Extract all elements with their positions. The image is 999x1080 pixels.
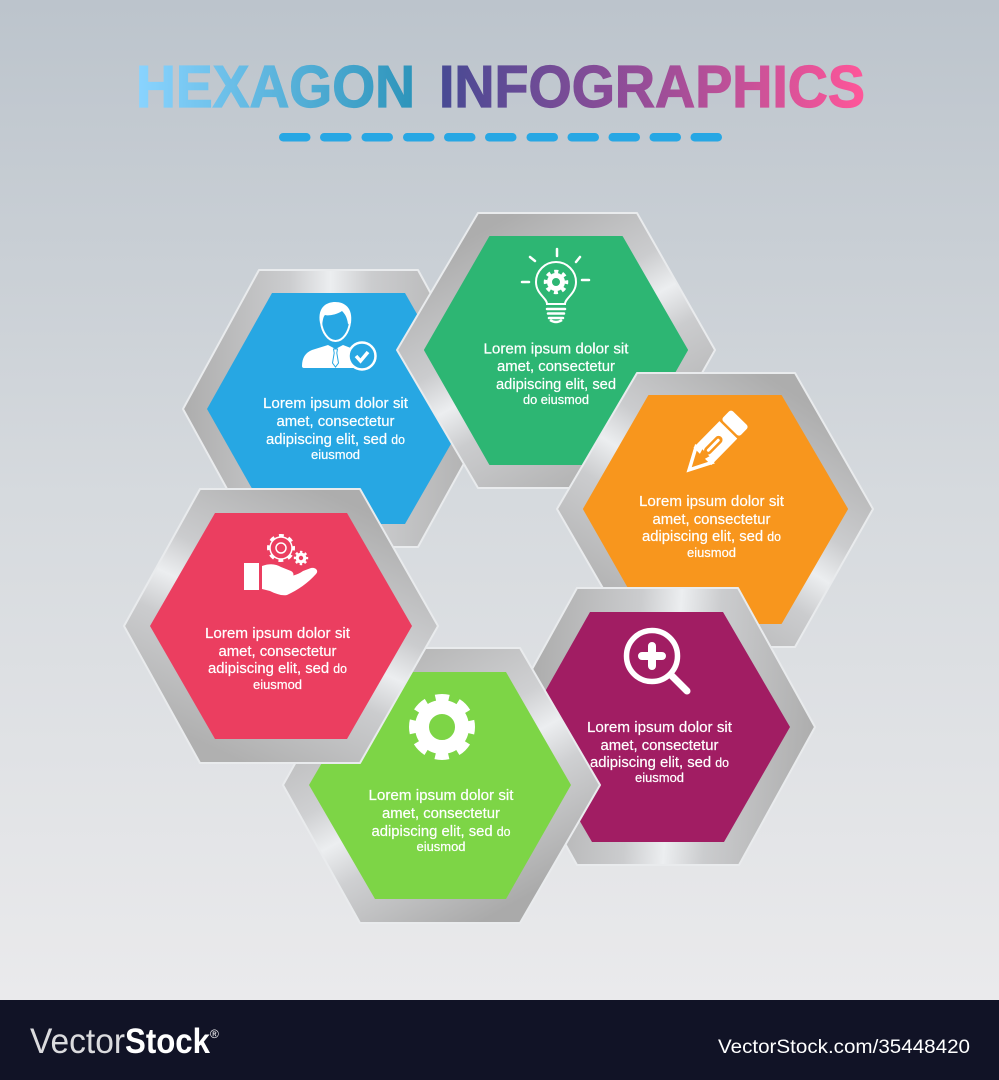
icon: light bulb with gear bbox=[522, 249, 589, 322]
footer image id: VectorStock.com/35448420 bbox=[718, 1036, 970, 1058]
title bbox=[136, 54, 865, 120]
text: lime panel: eiusmod bbox=[416, 840, 466, 854]
panel: red hexagon bbox=[124, 489, 438, 763]
text: red panel: Lorem ipsum dolor sit bbox=[205, 625, 351, 642]
text: purple panel bbox=[587, 719, 733, 785]
text: blue panel: adipiscing elit, sed do bbox=[266, 431, 405, 448]
panel: orange hexagon bbox=[557, 373, 873, 647]
text: green panel: amet, consectetur bbox=[497, 358, 615, 375]
text: red panel: adipiscing elit, sed do bbox=[208, 660, 347, 677]
dashed title underline bbox=[279, 133, 722, 142]
text: blue panel: Lorem ipsum dolor sit bbox=[263, 395, 409, 412]
icon: gear bbox=[412, 698, 472, 756]
icon: pencil bbox=[680, 409, 749, 479]
text: red panel: amet, consectetur bbox=[218, 643, 336, 660]
footer logo: ® bbox=[210, 1027, 219, 1041]
footer logo: Vector bbox=[30, 1022, 125, 1061]
footer logo: Stock bbox=[125, 1022, 210, 1061]
footer logo bbox=[30, 1022, 219, 1061]
panel: blue hexagon bbox=[183, 270, 494, 547]
panel: lime green hexagon bbox=[283, 648, 600, 923]
text: purple panel: Lorem ipsum dolor sit bbox=[587, 719, 733, 736]
text: blue panel: amet, consectetur bbox=[276, 413, 394, 430]
text: purple panel: eiusmod bbox=[635, 771, 684, 785]
text: lime panel bbox=[368, 787, 514, 854]
text: red panel: eiusmod bbox=[253, 678, 302, 692]
text: purple panel: adipiscing elit, sed do bbox=[590, 754, 729, 771]
text: purple panel: amet, consectetur bbox=[600, 737, 718, 754]
icon: hand with gears bbox=[244, 536, 317, 595]
text: blue panel bbox=[263, 395, 409, 462]
text: blue panel: eiusmod bbox=[311, 448, 360, 462]
text: lime panel: adipiscing elit, sed do bbox=[372, 823, 511, 840]
text: lime panel: Lorem ipsum dolor sit bbox=[368, 787, 514, 804]
text: orange panel: Lorem ipsum dolor sit bbox=[639, 493, 785, 510]
text: lime panel: amet, consectetur bbox=[382, 805, 500, 822]
panel: green hexagon bbox=[397, 213, 715, 488]
text: orange panel: eiusmod bbox=[687, 546, 736, 560]
text: green panel: Lorem ipsum dolor sit bbox=[484, 340, 629, 358]
text: green panel: do eiusmod bbox=[523, 393, 589, 407]
text: green panel bbox=[484, 340, 629, 407]
title: INFOGRAPHICS bbox=[439, 54, 865, 120]
text: green panel: adipiscing elit, sed bbox=[496, 376, 616, 393]
footer bar bbox=[0, 1000, 999, 1080]
text: orange panel bbox=[639, 493, 785, 560]
icon: magnifier with plus bbox=[626, 630, 687, 691]
text: orange panel: amet, consectetur bbox=[652, 511, 770, 528]
title: HEXAGON bbox=[136, 54, 415, 120]
icon: businessman with check bbox=[302, 302, 376, 370]
text: orange panel: adipiscing elit, sed do bbox=[642, 528, 781, 545]
panel: purple hexagon bbox=[500, 588, 815, 865]
text: red panel bbox=[205, 625, 351, 692]
